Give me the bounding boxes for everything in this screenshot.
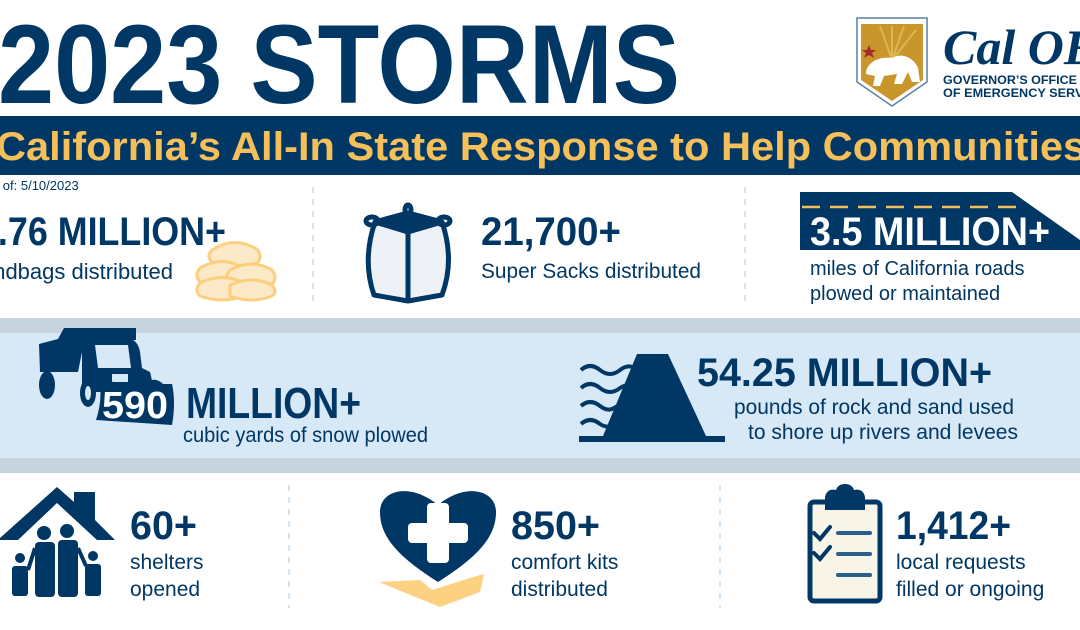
- stat: super sacks: Super Sacks distributed: [481, 260, 701, 283]
- stat: shelters: [0, 487, 204, 601]
- stat: roads: [800, 192, 1080, 305]
- stat: roads: miles of California roads: [810, 258, 1025, 280]
- icon: clipboard: [810, 484, 880, 601]
- stat: shelters: opened: [130, 578, 200, 601]
- title: 2023 STORMS: [0, 2, 680, 127]
- stat: comfort kits: comfort kits: [511, 551, 618, 574]
- stat: rock and sand: to shore up rivers and levees: [748, 421, 1018, 444]
- stat: local requests: 1,412+: [896, 504, 1011, 548]
- icon: super sack: [366, 205, 450, 301]
- logo: Cal OES: [857, 18, 1080, 106]
- stat: shelters: shelters: [130, 551, 204, 574]
- stat: roads: plowed or maintained: [810, 283, 1000, 305]
- stat: rock and sand: [579, 351, 1018, 444]
- stat: comfort kits: 850+: [511, 504, 600, 548]
- stat: comfort kits: [379, 491, 618, 607]
- stat: local requests: filled or ongoing: [896, 578, 1044, 601]
- stat: rock and sand: 54.25 MILLION+: [697, 351, 992, 395]
- stat: snow plowed: cubic yards of snow plowed: [183, 424, 428, 447]
- stat: rock and sand: pounds of rock and sand used: [734, 396, 1014, 419]
- logo: Cal OES: GOVERNOR’S OFFICE: [943, 73, 1077, 87]
- icon: heart with hand: [379, 491, 496, 607]
- stat: super sacks: [366, 205, 701, 301]
- icon: shield with bear: [857, 18, 927, 106]
- dividers: [289, 187, 745, 608]
- icon: house with family: [0, 487, 115, 597]
- stat: roads: 3.5 MILLION+: [810, 210, 1050, 254]
- stat: snow plowed: MILLION+: [186, 379, 361, 428]
- stat: snow plowed: [39, 328, 428, 447]
- stat: snow plowed: 590: [102, 385, 168, 427]
- stat: shelters: 60+: [130, 504, 197, 548]
- icon: sandbags: [197, 242, 275, 300]
- banner: California’s All-In State Response to Help Communities!: [0, 125, 1080, 169]
- stat: sandbags: [0, 210, 275, 300]
- middle band: [0, 318, 1080, 333]
- icon: road: [800, 192, 1080, 250]
- stat: comfort kits: distributed: [511, 578, 608, 601]
- icon: snow plow truck: [39, 328, 174, 425]
- icon: levee with waves: [579, 354, 725, 442]
- stat: local requests: local requests: [896, 551, 1026, 574]
- stat: super sacks: 21,700+: [481, 210, 621, 254]
- stat: local requests: [810, 484, 1044, 601]
